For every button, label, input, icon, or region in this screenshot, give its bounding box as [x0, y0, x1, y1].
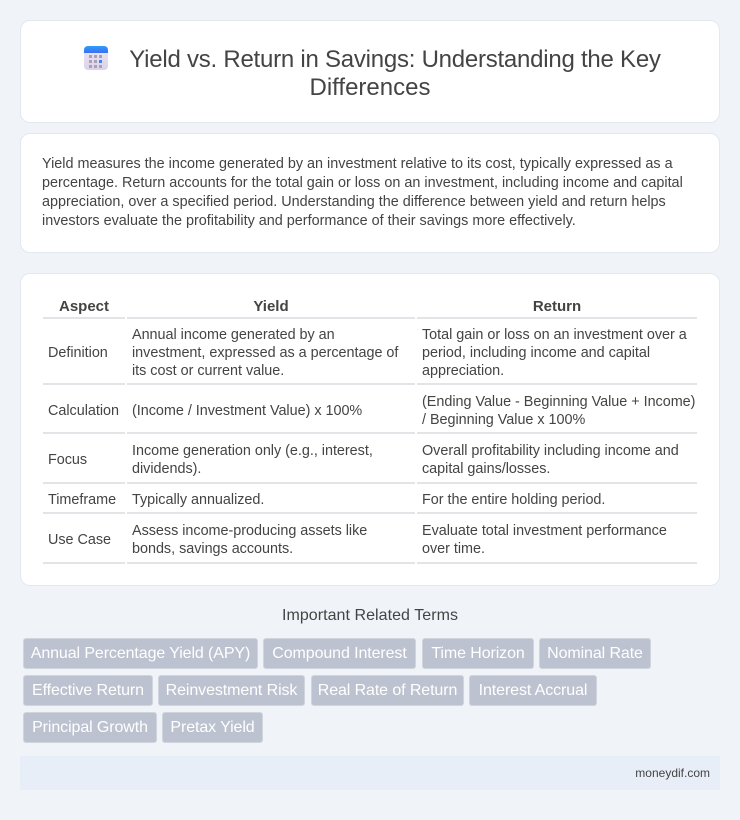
text: intro paragraph: Yield measures the income generated by an investment relative to its cost, typically expressed as a	[42, 156, 673, 172]
heading: title: Differences	[310, 74, 430, 101]
row: definition: its cost or current value.	[132, 363, 284, 379]
tag group: related terms: Real Rate of Return	[318, 682, 457, 699]
row: focus: capital gains/losses.	[422, 461, 550, 477]
heading: related terms: Important Related Terms	[282, 607, 458, 624]
row: timeframe: Timeframe	[48, 492, 116, 508]
row: focus: dividends).	[132, 461, 201, 477]
tag group: related terms	[23, 638, 651, 743]
tag group: related terms: Interest Accrual	[479, 682, 587, 699]
row: use case: over time.	[422, 541, 485, 557]
text: intro paragraph	[42, 156, 683, 229]
row: definition: Annual income generated by an	[132, 327, 335, 343]
table header	[43, 298, 697, 319]
tag group: related terms: Compound Interest	[272, 645, 407, 662]
table header: Yield	[253, 298, 289, 315]
tag group: related terms: Reinvestment Risk	[166, 682, 297, 699]
row: focus: Overall profitability including income and	[422, 443, 679, 459]
row: calculation: Calculation	[48, 403, 119, 419]
table header: Return	[533, 298, 581, 315]
row: definition: Definition	[48, 345, 108, 361]
tag group: related terms: Effective Return	[32, 682, 144, 699]
panel: introduction	[20, 133, 720, 253]
row: definition: appreciation.	[422, 363, 504, 379]
row: calculation: / Beginning Value x 100%	[422, 412, 585, 428]
text: intro paragraph: investors evaluate the profitability and performance of their savings more effectively.	[42, 213, 576, 229]
heading: title: Yield vs. Return in Savings: Understanding the Key	[129, 46, 661, 73]
row: focus: Focus	[48, 452, 87, 468]
table header: Aspect	[59, 298, 109, 315]
tag group: related terms: Principal Growth	[32, 719, 148, 736]
row: definition: investment, expressed as a percentage of	[132, 345, 398, 361]
row: use case: Use Case	[48, 532, 111, 548]
row: definition: Total gain or loss on an investment over a	[422, 327, 687, 343]
footer bar	[20, 756, 720, 790]
row: use case: Assess income-producing assets like	[132, 523, 367, 539]
row: calculation: (Income / Investment Value) x 100%	[132, 403, 362, 419]
row: focus: Income generation only (e.g., interest,	[132, 443, 373, 459]
tag group: related terms: Pretax Yield	[170, 719, 255, 736]
tag group: related terms: Annual Percentage Yield (APY)	[31, 645, 250, 662]
row: use case: Evaluate total investment performance	[422, 523, 667, 539]
row: timeframe: For the entire holding period.	[422, 492, 605, 508]
text: intro paragraph: appreciation, over a specified period. Understanding the difference between yield and return helps	[42, 194, 666, 210]
panel: title header	[20, 20, 720, 123]
heading: title	[129, 46, 661, 101]
row: timeframe: Typically annualized.	[132, 492, 264, 508]
row: use case: bonds, savings accounts.	[132, 541, 293, 557]
tag group: related terms: Time Horizon	[431, 645, 525, 662]
row: calculation: (Ending Value - Beginning Value + Income)	[422, 394, 695, 410]
row: definition	[43, 327, 697, 385]
panel: comparison table	[20, 273, 720, 586]
row: definition: period, including income and capital	[422, 345, 650, 361]
icon: calendar	[84, 46, 108, 70]
tag group: related terms: Nominal Rate	[547, 645, 643, 662]
row: use case	[43, 523, 697, 564]
row: timeframe	[43, 492, 697, 514]
text: source: moneydif.com	[635, 766, 710, 780]
row: focus	[43, 443, 697, 484]
text: intro paragraph: percentage. Return accounts for the total gain or loss on an investment, including income and capital	[42, 175, 683, 191]
row: calculation	[43, 394, 697, 434]
